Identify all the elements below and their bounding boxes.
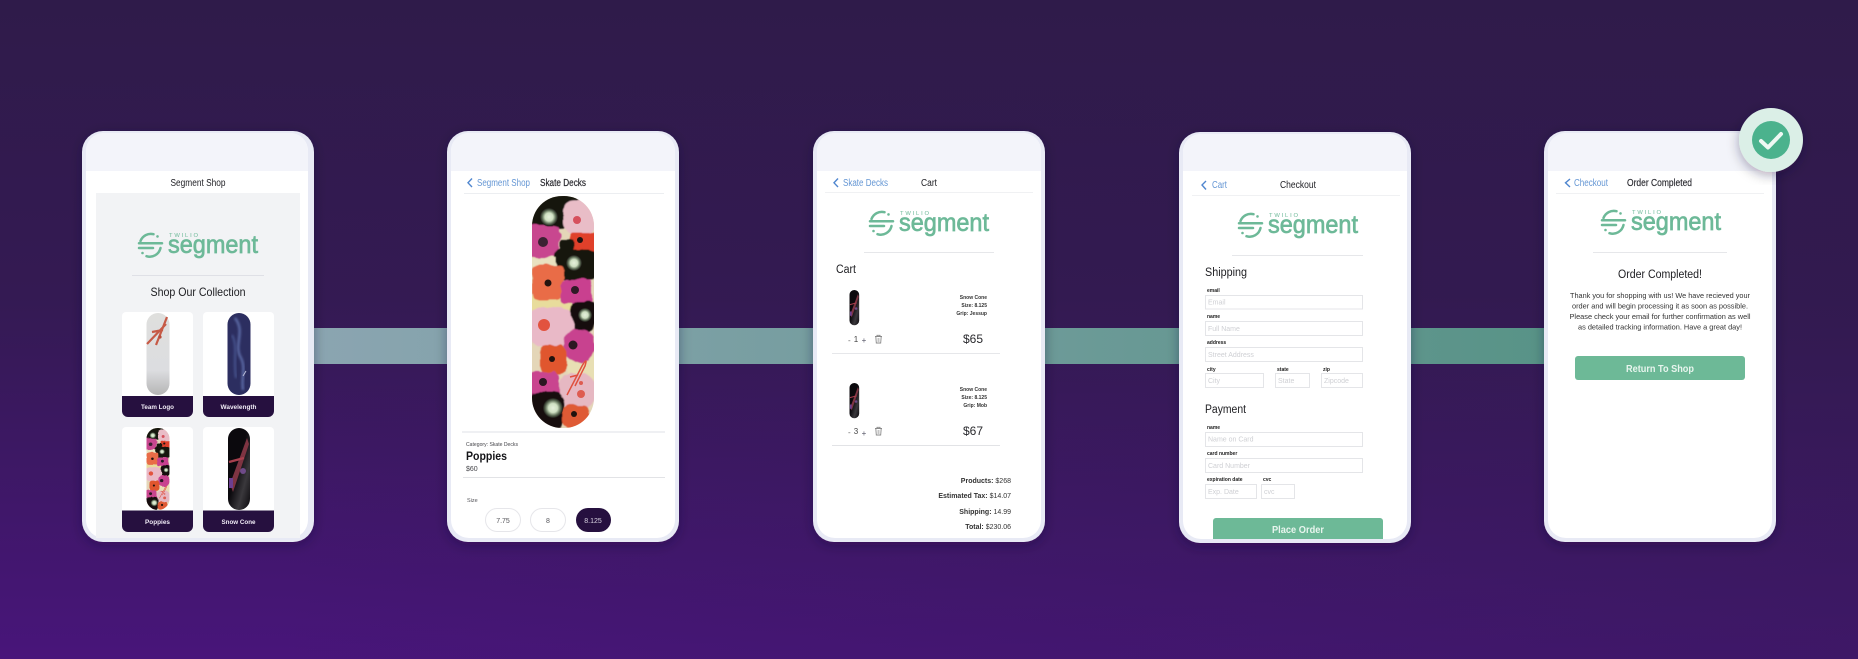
shipping form: zip xyxy=(1323,367,1330,373)
panel: phone 2 product detail xyxy=(447,131,679,542)
cart item 2 xyxy=(848,383,987,438)
cart item 1: 1 xyxy=(854,335,859,344)
size selector: 8 xyxy=(546,518,550,525)
product card: Team Logo xyxy=(122,312,193,417)
cart item 2: $67 xyxy=(963,424,983,438)
confirmation text: as detailed tracking information. Have a great day! xyxy=(1578,322,1742,332)
payment form: card number xyxy=(1207,451,1237,457)
size selector: 8.125 xyxy=(584,518,602,525)
cart item 1: - xyxy=(848,336,851,345)
logo: Twilio Segment: TWILIO xyxy=(169,233,198,239)
payment form: Payment xyxy=(1205,404,1247,416)
product info xyxy=(466,442,518,473)
heading: Segment Shop: Segment Shop xyxy=(170,178,226,189)
product card: Poppies: Poppies xyxy=(145,519,170,526)
order totals: Estimated Tax: $14.07 xyxy=(938,493,1011,500)
product card: Wavelength xyxy=(203,312,274,417)
payment form: Card Number xyxy=(1208,463,1251,470)
shipping form: Shipping xyxy=(1205,267,1247,279)
shipping form: Zipcode xyxy=(1324,378,1349,385)
size selector xyxy=(467,498,611,532)
shipping form: state xyxy=(1277,367,1289,373)
cart item 2: Size: 8.125 xyxy=(961,395,987,401)
order totals: Shipping: 14.99 xyxy=(959,509,1011,516)
navigation bar xyxy=(1202,180,1316,191)
shipping form: Street Address xyxy=(1208,352,1254,359)
order totals: Total: $230.06 xyxy=(965,524,1011,531)
confirmation text: Thank you for shopping with us! We have recieved your xyxy=(1570,291,1751,300)
button: Return To Shop: Return To Shop xyxy=(1626,364,1694,375)
cart item 1: + xyxy=(862,336,867,345)
cart item 2: Grip: Mob xyxy=(963,403,987,409)
product info: Poppies xyxy=(466,449,507,463)
cart item 1: $65 xyxy=(963,332,983,346)
product info: $60 xyxy=(466,466,478,473)
payment form: expiration date xyxy=(1207,477,1243,483)
heading: Shop Our Collection: Shop Our Collection xyxy=(150,285,246,299)
shipping form: name xyxy=(1207,314,1220,320)
payment form: Exp. Date xyxy=(1208,489,1239,496)
confirmation text: order and will begin processing it as soon as possible. xyxy=(1572,302,1748,310)
navigation bar: Cart xyxy=(1212,180,1227,191)
logo: Twilio Segment: segment xyxy=(1268,211,1358,239)
logo: Twilio Segment: segment xyxy=(899,209,989,237)
size selector: Size xyxy=(467,498,478,504)
navigation bar: Order Completed xyxy=(1627,178,1692,189)
payment form xyxy=(1205,404,1362,498)
confirmation text: Please check your email for further confirmation as well xyxy=(1570,312,1751,321)
shipping form: city xyxy=(1207,367,1216,373)
shipping form: Email xyxy=(1208,300,1226,306)
confirmation text xyxy=(1570,291,1751,332)
logo: Twilio Segment: TWILIO xyxy=(1269,213,1298,219)
shipping form: email xyxy=(1207,288,1220,294)
payment form: Name on Card xyxy=(1208,436,1254,444)
cart item 2: 3 xyxy=(854,427,859,436)
navigation bar xyxy=(1566,178,1692,189)
cart item 2: Snow Cone xyxy=(960,387,987,393)
cart item 1: Grip: Jessup xyxy=(956,311,987,317)
panel: phone 4 checkout xyxy=(1179,132,1411,543)
cart item 1 xyxy=(848,290,987,346)
payment form: cvc xyxy=(1263,477,1272,483)
cart item 1: Size: 8.125 xyxy=(961,303,987,309)
logo: Twilio Segment: TWILIO xyxy=(1632,210,1661,216)
button: Place Order xyxy=(1213,518,1383,539)
navigation bar: Skate Decks xyxy=(843,178,888,189)
payment form: cvc xyxy=(1264,489,1275,496)
panel: phone 1 shop home xyxy=(82,131,314,542)
shipping form: address xyxy=(1207,340,1226,346)
panel: phone 3 cart xyxy=(813,131,1045,542)
cart item 2: + xyxy=(862,429,867,438)
skateboard: Poppies xyxy=(528,190,597,430)
heading: Order Completed: Order Completed! xyxy=(1618,269,1702,281)
order totals xyxy=(938,478,1011,531)
button: Return To Shop xyxy=(1575,356,1745,380)
product card: Poppies xyxy=(122,426,193,532)
logo: Twilio Segment: segment xyxy=(168,231,258,259)
shipping form xyxy=(1205,267,1362,388)
product card: Team Logo: Team Logo xyxy=(141,404,174,411)
navigation bar: Checkout xyxy=(1574,178,1608,189)
logo: Twilio Segment: segment xyxy=(1631,208,1721,236)
panel: phone 5 order completed xyxy=(1544,131,1776,542)
cart item 2: - xyxy=(848,428,851,437)
payment form: name xyxy=(1207,425,1220,431)
icon: completed check badge xyxy=(1739,108,1803,172)
shipping form: City xyxy=(1208,378,1221,385)
navigation bar xyxy=(468,178,586,189)
navigation bar: Segment Shop xyxy=(477,178,530,189)
shipping form: State xyxy=(1278,378,1294,385)
navigation bar: Checkout xyxy=(1280,180,1316,191)
connector band linking the screens xyxy=(314,328,1544,364)
navigation bar: Skate Decks xyxy=(540,178,586,189)
product card: Snow Cone xyxy=(203,427,274,532)
navigation bar: Cart xyxy=(921,178,937,189)
size selector: 7.75 xyxy=(496,518,510,525)
product card: Snow Cone: Snow Cone xyxy=(222,519,256,526)
order totals: Products: $268 xyxy=(961,478,1011,485)
logo: Twilio Segment: TWILIO xyxy=(900,211,929,217)
product info: Category: Skate Decks xyxy=(466,442,518,448)
shipping form: Full Name xyxy=(1208,326,1240,333)
product card: Wavelength: Wavelength xyxy=(220,404,256,411)
navigation bar xyxy=(834,178,937,189)
button: Place Order: Place Order xyxy=(1272,525,1324,536)
cart item 1: Snow Cone xyxy=(960,295,987,301)
heading: Cart: Cart xyxy=(836,264,857,276)
